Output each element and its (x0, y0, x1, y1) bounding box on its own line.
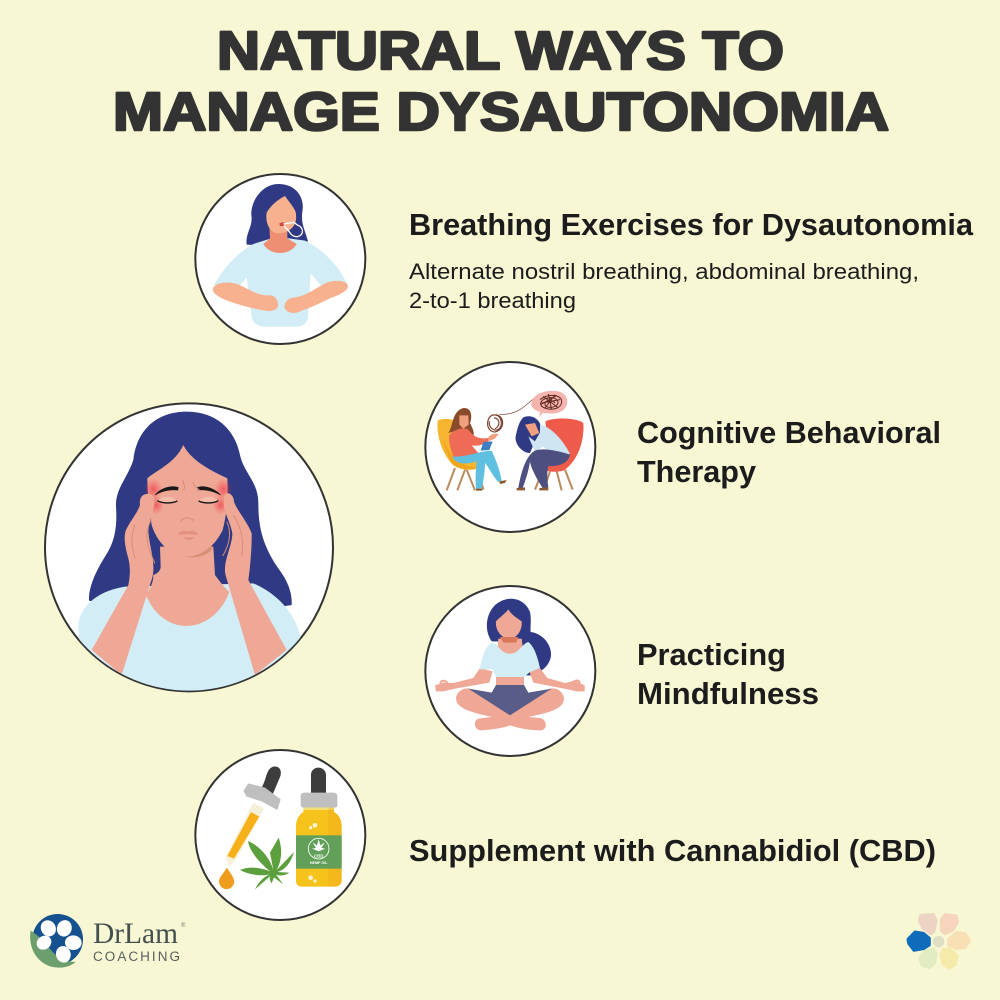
text: breathing techniques (409, 259, 919, 313)
therapist (448, 408, 507, 491)
logo: DrLam Coaching: DrLam (93, 917, 178, 950)
icon: pastel flower (908, 915, 969, 968)
thought line and scribbles (488, 391, 567, 432)
heading: cognitive behavioral therapy: Therapy (637, 454, 757, 489)
title: MANAGE DYSAUTONOMIA (113, 82, 889, 142)
heading: breathing exercises: Breathing Exercises for Dysautonomia (409, 207, 974, 242)
heading: practicing mindfulness (637, 637, 819, 711)
text: breathing techniques: Alternate nostril breathing, abdominal breathing, (409, 259, 919, 284)
logo: DrLam Coaching: COACHING (93, 949, 180, 964)
heading: cognitive behavioral therapy: Cognitive Behavioral (637, 415, 941, 450)
logo: DrLam Coaching (30, 914, 186, 968)
illustration: woman with headache (45, 403, 333, 693)
dropper (219, 767, 281, 889)
illustration: breathing exercise (195, 174, 365, 344)
closed eyes (157, 497, 218, 503)
text: breathing techniques: 2-to-1 breathing (409, 288, 576, 313)
logo mark (30, 914, 83, 968)
distressed patient (516, 416, 570, 490)
eyebrows (155, 486, 221, 495)
title: NATURAL WAYS TO (217, 21, 784, 81)
heading: practicing mindfulness: Practicing (637, 637, 786, 672)
bottle (296, 768, 342, 887)
mouth (178, 531, 199, 535)
illustration: CBD oil dropper and bottle (195, 750, 365, 920)
right arm and hand (224, 493, 287, 675)
heading: practicing mindfulness: Mindfulness (637, 676, 819, 711)
bottle: CBD (314, 853, 323, 858)
illustration: therapy session (425, 362, 595, 532)
left chair (437, 419, 485, 490)
title (113, 21, 889, 142)
cannabis leaf (240, 838, 294, 889)
right chair (535, 419, 583, 490)
illustration: mindfulness meditation (425, 586, 595, 756)
logo: DrLam Coaching: ® (181, 922, 186, 929)
bottle: HEMP OIL (310, 861, 328, 865)
heading: supplement with cannabidiol: Supplement with Cannabidiol (CBD) (409, 833, 936, 868)
left arm and hand (92, 494, 154, 675)
heading: cognitive behavioral therapy (637, 415, 941, 489)
